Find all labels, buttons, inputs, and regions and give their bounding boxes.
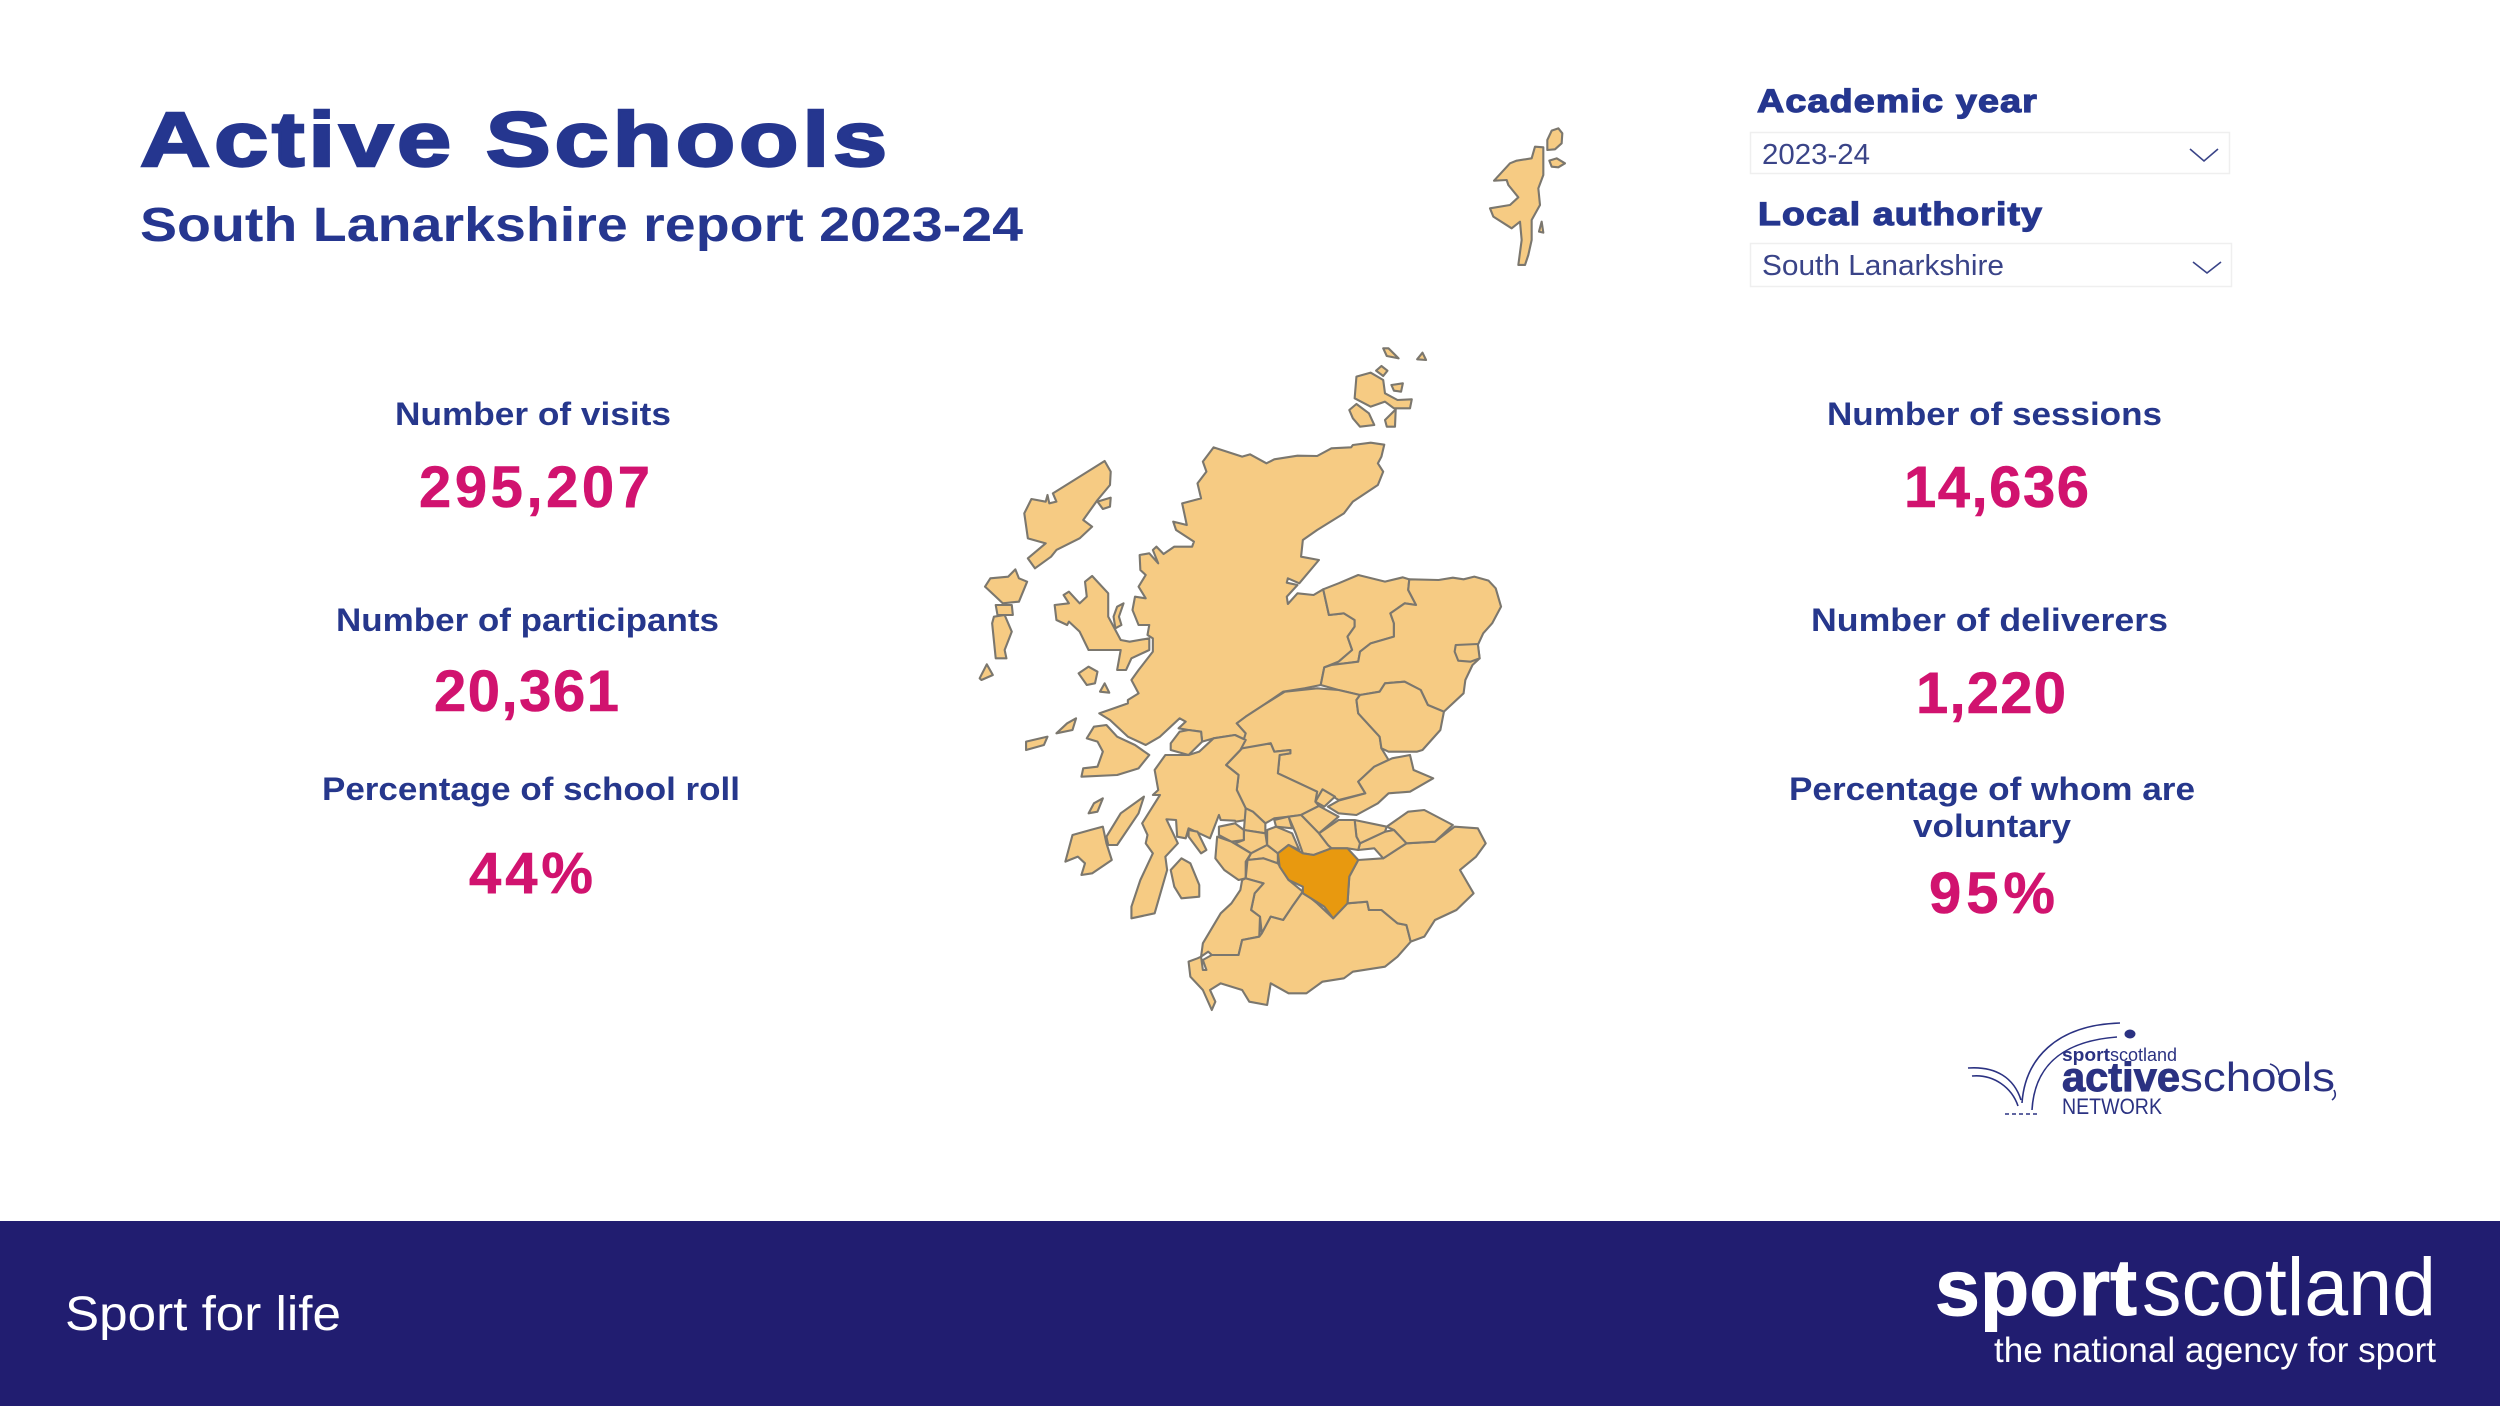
Angus: [1356, 682, 1444, 752]
West Dunbartonshire: [1244, 808, 1265, 833]
sportscotland logo: the national agency for sport: [1994, 1331, 2436, 1370]
stat: number of participants: 20,361: [434, 659, 619, 724]
mainland and islands: [980, 348, 1501, 1010]
Active Schools Network logo: sport: [2062, 1045, 2110, 1065]
East Dunbartonshire: [1274, 817, 1292, 828]
stat: number of participants: [336, 602, 719, 724]
Midlothian: [1358, 830, 1406, 858]
stat: percentage of whom are voluntary: voluntary: [1913, 808, 2071, 844]
map of Scotland by local authority: [980, 128, 1565, 1010]
Active Schools Network logo: scotland: [2110, 1045, 2177, 1065]
Active Schools Network logo: active: [2062, 1054, 2180, 1100]
filter: local authority: Local authority: [1758, 196, 2043, 232]
Aberdeenshire: [1321, 577, 1501, 712]
filter: local authority: [1750, 196, 2232, 286]
West Lothian: [1319, 820, 1360, 850]
stat: number of visits: [395, 396, 671, 520]
title: Active Schools: [140, 97, 891, 183]
Fife: [1328, 755, 1433, 815]
sportscotland logo: scotland: [2142, 1242, 2436, 1333]
Bute: [1189, 830, 1206, 853]
Shetland: [1490, 128, 1565, 265]
South Lanarkshire highlighted: [1278, 845, 1358, 918]
South Ayrshire: [1201, 878, 1264, 957]
Cowal: [1171, 730, 1202, 755]
stat: percentage of whom are voluntary: [1789, 771, 2195, 926]
filter: academic year: 2023-24: [1762, 139, 1870, 171]
North Ayrshire: [1215, 837, 1251, 880]
stat: percentage of whom are voluntary: 95%: [1929, 861, 2055, 926]
Islay: [1065, 827, 1112, 875]
North Lanarkshire: [1289, 815, 1331, 855]
Western Isles: [980, 461, 1111, 680]
East Lothian: [1387, 810, 1453, 843]
filter: academic year: [1750, 83, 2230, 174]
footer slogan: Sport for life: [65, 1288, 341, 1341]
Gigha: [1089, 798, 1103, 813]
subtitle: South Lanarkshire report 2023-24: [140, 199, 1023, 252]
sportscotland logo: [1935, 1242, 2436, 1370]
stat: number of deliverers: 1,220: [1916, 661, 2066, 726]
stat: number of participants: Number of participants: [336, 602, 719, 638]
East Renfrewshire: [1247, 845, 1278, 863]
Perth and Kinross: [1237, 688, 1389, 800]
Arran: [1171, 858, 1199, 898]
Skye and small isles: [1055, 576, 1149, 693]
sportscotland logo: sport: [1935, 1243, 2137, 1332]
stat: number of sessions: [1827, 396, 2162, 520]
Clackmannanshire: [1315, 789, 1335, 807]
Stirling: [1226, 743, 1319, 823]
stat: percentage of school roll: Percentage of school roll: [322, 771, 740, 807]
Active Schools Network logo: NETWORK: [2062, 1094, 2162, 1119]
Southern mainland authorities: [1026, 718, 1486, 1010]
East Ayrshire: [1246, 858, 1303, 933]
Inverclyde: [1219, 823, 1244, 842]
stat: number of deliverers: Number of deliverers: [1811, 602, 2168, 638]
Aberdeen City: [1455, 644, 1480, 662]
Falkirk: [1301, 806, 1339, 833]
Jura: [1106, 797, 1144, 845]
footer band: [0, 1221, 2500, 1406]
stat: number of sessions: 14,636: [1904, 455, 2089, 520]
Edinburgh: [1355, 820, 1387, 843]
Renfrewshire: [1235, 830, 1267, 853]
stat: percentage of school roll: [322, 771, 740, 906]
Coll: [1056, 718, 1076, 733]
Glasgow: [1267, 827, 1299, 853]
stat: percentage of school roll: 44%: [469, 841, 593, 906]
Active Schools Network logo: schools: [2180, 1054, 2335, 1100]
Mull: [1081, 725, 1149, 777]
filter: academic year: Academic year: [1757, 83, 2038, 119]
stat: number of visits: Number of visits: [395, 396, 671, 432]
stat: percentage of whom are voluntary: Percentage of whom are: [1789, 771, 2195, 807]
stat: number of sessions: Number of sessions: [1827, 396, 2162, 432]
stat: number of visits: 295,207: [419, 455, 650, 520]
Tiree: [1026, 737, 1047, 750]
Scottish Borders: [1347, 827, 1486, 942]
Moray: [1323, 575, 1416, 665]
filter: local authority: South Lanarkshire: [1762, 250, 2004, 282]
stat: number of deliverers: [1811, 602, 2168, 726]
Orkney: [1349, 348, 1426, 427]
Highland: [1099, 443, 1384, 745]
Active Schools Network logo: [1968, 1023, 2335, 1119]
Dumfries and Galloway: [1189, 892, 1411, 1010]
Argyll and Bute: [1131, 735, 1246, 918]
